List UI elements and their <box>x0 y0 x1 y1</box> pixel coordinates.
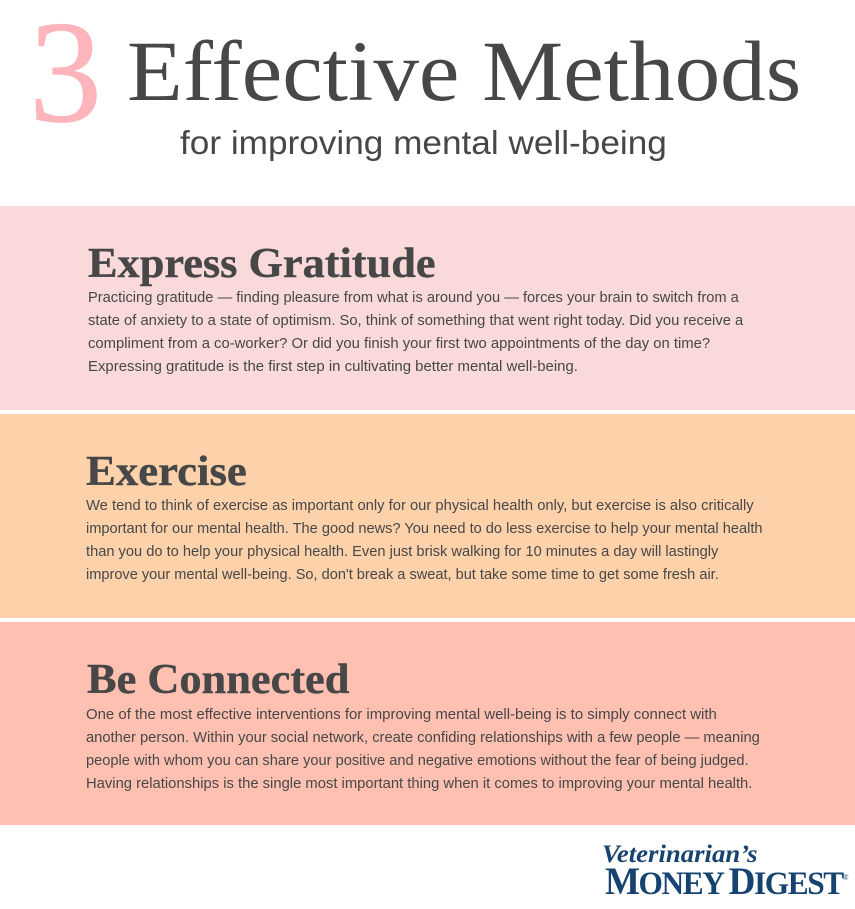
text: express gratitude: Practicing gratitude — finding pleasure from what is around you — forces your brain to switch from a <box>88 290 739 306</box>
logo: Veterinarian's Money Digest <box>602 841 849 903</box>
heading: be connected: Be Connected <box>87 657 349 703</box>
text: exercise: improve your mental well-being. So, don't break a sweat, but take some time to get some fresh air. <box>86 567 719 583</box>
logo line: Money Digest: MONEY DIGEST® <box>605 860 849 903</box>
text: express gratitude <box>88 290 744 375</box>
text: exercise <box>86 498 762 583</box>
text: be connected <box>86 707 760 792</box>
text: express gratitude: Expressing gratitude is the first step in cultivating better mental well-being. <box>88 359 578 375</box>
text: be connected: One of the most effective interventions for improving mental well-being is to simply connect with <box>86 707 717 723</box>
subtitle: for improving mental well-being <box>180 124 667 161</box>
text: express gratitude: state of anxiety to a state of optimism. So, think of something that went right today. Did you receive a <box>88 313 743 329</box>
text: express gratitude: compliment from a co-worker? Or did you finish your first two appointments of the day on time? <box>88 336 710 352</box>
title: Effective Methods <box>127 23 801 119</box>
text: be connected: Having relationships is the single most important thing when it comes to improving your mental health. <box>86 776 752 792</box>
panel: express gratitude <box>0 206 855 410</box>
panel: be connected <box>0 622 855 825</box>
panel: exercise <box>0 414 855 618</box>
text: exercise: We tend to think of exercise as important only for our physical health only, but exercise is also critically <box>86 498 754 514</box>
heading: express gratitude: Express Gratitude <box>88 241 436 287</box>
logo line: Veterinarian's: Veterinarian’s <box>602 841 758 868</box>
text: exercise: important for our mental health. The good news? You need to do less exercise to help your mental health <box>86 521 762 537</box>
heading: exercise: Exercise <box>86 449 247 495</box>
text: be connected: people with whom you can share your positive and negative emotions without the fear of being judged. <box>86 753 749 769</box>
text: exercise: than you do to help your physical health. Even just brisk walking for 10 minutes a day will lastingly <box>86 544 718 560</box>
text: be connected: another person. Within your social network, create confiding relationships with a few people — meaning <box>86 730 760 746</box>
